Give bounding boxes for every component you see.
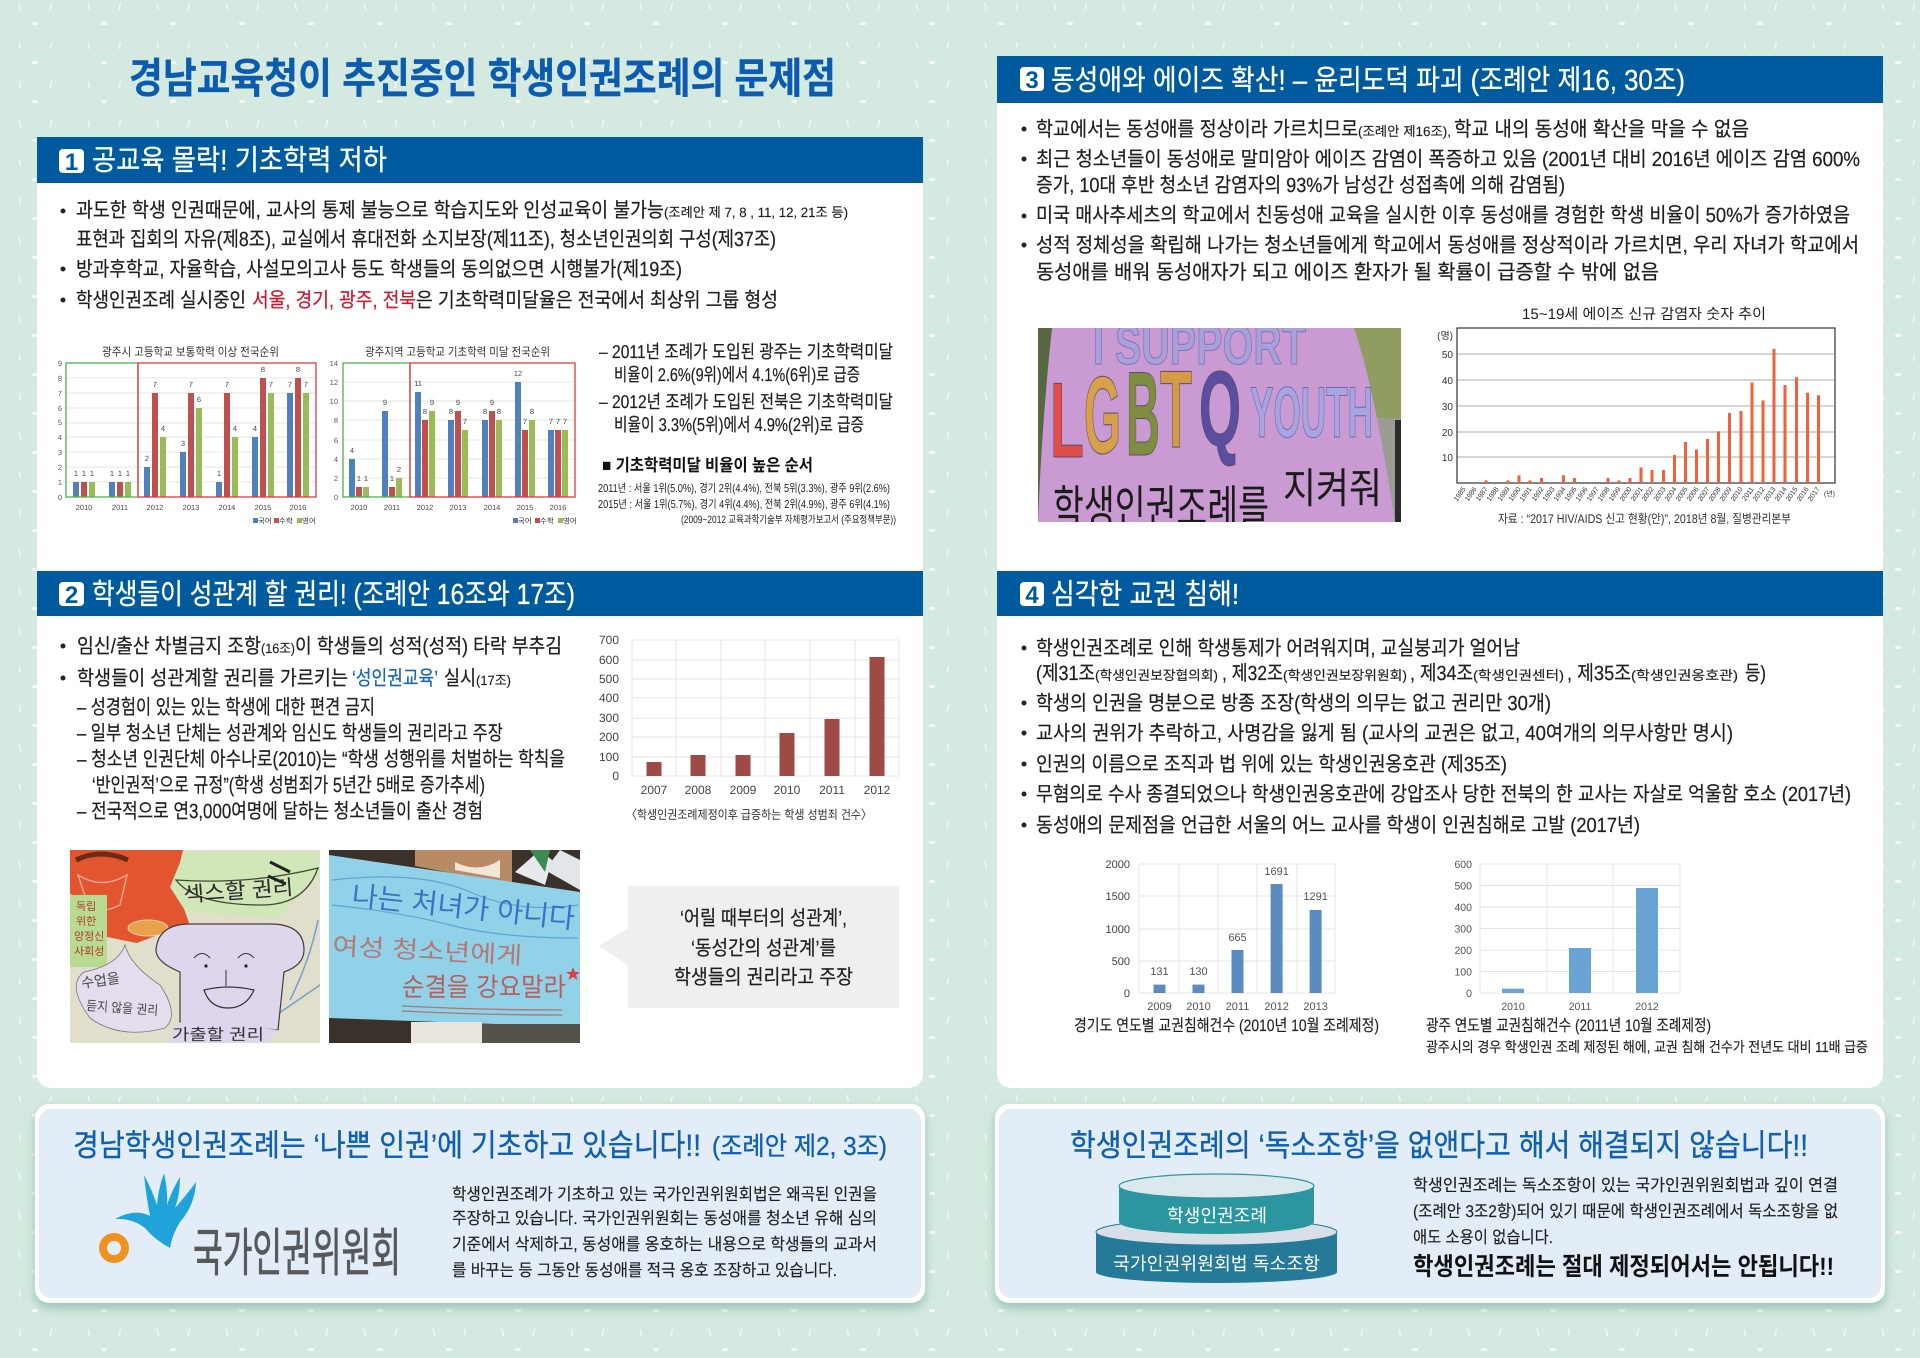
section 3: bullet text: 동성애를 배워 동성애자가 되고 에이즈 환자가 될 확률이 급증할 수 밖에 없음 (1036, 261, 1659, 284)
chart: 15~19세 에이즈 신규 감염자: 1992 (1531, 486, 1546, 503)
chart: 광주시 보통학력 이상 전국순위: 8 (261, 365, 265, 374)
chart: 광주시 보통학력 이상 전국순위: 2 (145, 454, 149, 463)
chart: 15~19세 에이즈 신규 감염자: 2000 (1619, 486, 1634, 503)
chart: 15~19세 에이즈 신규 감염자: 1989 (1497, 486, 1512, 503)
section 1: bullet text: 방과후학교, 자율학습, 사설모의고사 등도 학생들의 동의없으면 시행불가(제19조) (76, 258, 682, 281)
chart: 학생 성범죄 건수: 2008 (685, 783, 712, 797)
chart: 15~19세 에이즈 신규 감염자 (1437, 306, 1835, 526)
section 4: bullet text: 학생인권조례로 인해 학생통제가 어려워지며, 교실붕괴가 얼어남 (1036, 637, 1520, 660)
chart: 학생 성범죄 건수: 400 (599, 691, 619, 705)
chart: 15~19세 에이즈 신규 감염자: 40 (1442, 376, 1453, 387)
section 4: header bar: 4 (1025, 582, 1039, 609)
chart: 경기도 교권침해건수: 1691 (1264, 866, 1289, 878)
panel: 독소조항 box (995, 1104, 1885, 1303)
chart: 경기도 교권침해건수: 2010 (1186, 1001, 1211, 1013)
chart: 광주시 보통학력 이상 전국순위: 6 (197, 395, 201, 404)
chart: 광주시 보통학력 이상 전국순위: 1 (74, 469, 78, 478)
chart: 광주 교권침해건수: 2012 (1635, 1001, 1659, 1013)
chart: 광주시 보통학력 이상 전국순위: 6 (58, 404, 62, 413)
section 3: bullet text: (조례안 제16조), (1358, 124, 1451, 139)
chart: 15~19세 에이즈 신규 감염자: 10 (1442, 453, 1453, 464)
chart: 광주지역 기초학력 미달 전국순위: 8 (497, 407, 501, 416)
chart: 15~19세 에이즈 신규 감염자: 1998 (1597, 486, 1612, 503)
chart: 경기도 교권침해건수: 2011 (1226, 1001, 1249, 1013)
chart: 광주 교권침해건수: 2010 (1501, 1001, 1525, 1013)
chart: 학생 성범죄 건수: 600 (599, 653, 619, 667)
chart: 광주지역 기초학력 미달 전국순위: 광주지역 고등학교 기초학력 미달 전국순위 (365, 345, 550, 359)
chart: 경기도 교권침해건수: 131 (1150, 966, 1169, 978)
section 2: bullet text: ‘성인권교육’ (352, 667, 438, 690)
chart: 광주시 보통학력 이상 전국순위: 4 (233, 424, 237, 433)
photo: LGBTQ youth sign: L (1050, 360, 1084, 480)
section 1: header bar: 1 (65, 149, 78, 176)
chart: 15~19세 에이즈 신규 감염자: 2001 (1630, 486, 1645, 503)
section 4: bullet text (1022, 637, 1851, 837)
section 1: bullet text: 표현과 집회의 자유(제8조), 교실에서 휴대전화 소지보장(제11조), 청소년인권의회 구성(제37조) (76, 228, 776, 251)
callout: 성관계 주장: ‘동성간의 성관계’를 (691, 937, 836, 960)
chart: 15~19세 에이즈 신규 감염자: 2006 (1686, 486, 1701, 503)
chart: 광주지역 기초학력 미달 전국순위: 8 (530, 407, 534, 416)
section 4: header bar: 심각한 교권 침해! (1051, 579, 1239, 611)
section 2: bullet text: (17조) (476, 673, 511, 688)
chart: 광주시 보통학력 이상 전국순위: 수학 (279, 516, 293, 526)
text block: 국가인권위원회법 설명: 학생인권조례가 기초하고 있는 국가인권위원회법은 왜곡된 인권을 (452, 1185, 877, 1204)
chart: 학생 성범죄 건수: 700 (599, 633, 619, 647)
photo: 권리 poster (70, 850, 320, 1045)
text block: 독소조항 설명 (1413, 1176, 1838, 1281)
section 1: bullet text: 학생인권조례 실시중인 (76, 289, 246, 312)
chart: 학생 성범죄 건수: 2009 (730, 783, 757, 797)
chart: 학생 성범죄 건수: 2010 (774, 783, 801, 797)
text block: 국가인권위원회법 설명 (452, 1185, 877, 1280)
photo: 권리 poster: 독립 (76, 900, 96, 913)
section 1: bullet text: 과도한 학생 인권때문에, 교사의 통제 불능으로 학습지도와 인성교육이 불가능 (76, 199, 664, 222)
chart: 광주지역 기초학력 미달 전국순위: 1 (364, 474, 368, 483)
section 3: bullet text: 성적 정체성을 확립해 나가는 청소년들에게 학교에서 동성애를 정상적이라 가르치면, 우리 자녀가 학교에서 (1036, 234, 1859, 257)
chart: 광주시 보통학력 이상 전국순위: 2010 (76, 503, 92, 512)
section 3: bullet text: 학교에서는 동성애를 정상이라 가르치므로 (1036, 118, 1358, 141)
section 4: bullet text: (학생인권옹호관) (1631, 668, 1738, 683)
section 4: bullet text: 동성애의 문제점을 언급한 서울의 어느 교사를 학생이 인권침해로 고발 (2017년) (1036, 814, 1640, 837)
section 4: bullet text: (학생인권보장위원회) (1283, 668, 1407, 683)
section 1: bullet text: (조례안 제 7, 8 , 11, 12, 21조 등) (664, 205, 848, 220)
chart: 광주지역 기초학력 미달 전국순위: 11 (414, 379, 422, 388)
chart: 광주시 보통학력 이상 전국순위: 2014 (219, 503, 235, 512)
chart: 15~19세 에이즈 신규 감염자: 2007 (1697, 486, 1712, 503)
chart: 광주지역 기초학력 미달 전국순위: 9 (383, 398, 387, 407)
section 2: bullet text: 임신/출산 차별금지 조항 (77, 635, 261, 658)
chart: 15~19세 에이즈 신규 감염자: 2014 (1774, 486, 1789, 503)
chart: 15~19세 에이즈 신규 감염자: 1995 (1564, 486, 1579, 503)
section 3: header bar: 동성애와 에이즈 확산! – 윤리도덕 파괴 (조례안 제16, 30조) (1051, 65, 1685, 97)
heading: 독소조항: 학생인권조례의 ‘독소조항’을 없앤다고 해서 해결되지 않습니다!! (1070, 1128, 1808, 1163)
text block: 국가인권위원회법 설명: 를 바꾸는 등 그동안 동성애를 적극 옹호 조장하고 있습니다. (452, 1261, 837, 1280)
chart: 경기도 교권침해건수: 2013 (1303, 1001, 1328, 1013)
section 1: achievement notes: – 2011년 조례가 도입된 광주는 기초학력미달 (599, 341, 893, 362)
photo: blue banner: 여성 청소년에게 (332, 926, 523, 971)
chart: 광주 교권침해건수: 500 (1454, 880, 1472, 892)
callout: 성관계 주장: ‘어릴 때부터의 성관계’, (680, 907, 847, 930)
chart: 광주지역 기초학력 미달 전국순위: 국어 (518, 516, 532, 526)
chart: 학생 성범죄 건수: 200 (599, 730, 619, 744)
chart: 광주시 보통학력 이상 전국순위: 7 (58, 389, 62, 398)
chart: 광주지역 기초학력 미달 전국순위: 2013 (450, 503, 466, 512)
chart: 광주지역 기초학력 미달 전국순위: 8 (483, 407, 487, 416)
icon: layered cylinders (1096, 1174, 1337, 1283)
callout: 성관계 주장: 학생들의 권리라고 주장 (674, 966, 853, 989)
section 1: achievement notes: – 2012년 조례가 도입된 전북은 기초학력미달 (599, 391, 893, 412)
chart: 광주지역 기초학력 미달 전국순위: 0 (334, 493, 338, 502)
chart: 광주지역 기초학력 미달 전국순위: 8 (449, 407, 453, 416)
section 4: bullet text: 등) (1745, 662, 1766, 685)
text block: 독소조항 설명: (조례안 3조2항)되어 있기 때문에 학생인권조례에서 독소조항을 없 (1413, 1202, 1838, 1221)
chart: 광주지역 기초학력 미달 전국순위: 7 (563, 417, 567, 426)
chart: 15~19세 에이즈 신규 감염자: 1988 (1486, 486, 1501, 503)
chart: 광주시 보통학력 이상 전국순위: 3 (181, 439, 185, 448)
heading: 나쁜 인권: 경남학생인권조례는 ‘나쁜 인권’에 기초하고 있습니다!! (73, 1128, 701, 1163)
chart: 광주지역 기초학력 미달 전국순위: 7 (556, 417, 560, 426)
chart: 광주시 보통학력 이상 전국순위: 2016 (290, 503, 306, 512)
chart: 15~19세 에이즈 신규 감염자: 1985 (1453, 486, 1468, 503)
section 2: header bar: 학생들이 성관계 할 권리! (조례안 16조와 17조) (92, 579, 575, 611)
chart: 광주지역 기초학력 미달 전국순위: 2 (397, 465, 401, 474)
panel: left white card (37, 137, 923, 1088)
chart: 광주지역 기초학력 미달 전국순위: 2012 (417, 503, 433, 512)
section 2: bullet text (60, 635, 565, 823)
section 4: bullet text: (제31조 (1036, 662, 1095, 685)
chart: 15~19세 에이즈 신규 감염자: 1999 (1608, 486, 1623, 503)
chart: 학생 성범죄 건수: 2011 (819, 783, 845, 797)
chart: 광주시 보통학력 이상 전국순위: 2012 (147, 503, 163, 512)
chart: 광주시 보통학력 이상 전국순위: 7 (225, 380, 229, 389)
section 2: bullet text: (16조) (261, 641, 295, 656)
photo: LGBTQ youth sign: T (1160, 348, 1192, 471)
section 4: bullet text: (학생인권센터) (1473, 668, 1564, 683)
chart: 광주지역 기초학력 미달 전국순위: 9 (456, 398, 460, 407)
chart: 광주지역 기초학력 미달 전국순위: 7 (549, 417, 553, 426)
section 3: bullet text: 미국 매사추세츠의 학교에서 친동성애 교육을 실시한 이후 동성애를 경험한 학생 비율이 50%가 증가하였음 (1036, 204, 1850, 227)
chart: 15~19세 에이즈 신규 감염자: 2009 (1719, 486, 1734, 503)
chart: 15~19세 에이즈 신규 감염자: 2002 (1641, 486, 1656, 503)
chart: 광주지역 기초학력 미달 전국순위: 12 (330, 378, 338, 387)
chart: 15~19세 에이즈 신규 감염자: 1990 (1508, 486, 1523, 503)
chart: 광주 교권침해건수: 200 (1454, 945, 1472, 957)
chart: 광주 교권침해건수: 600 (1454, 859, 1472, 871)
section 1: header bar: 공교육 몰락! 기초학력 저하 (92, 145, 387, 177)
chart: 15~19세 에이즈 신규 감염자: 20 (1442, 428, 1453, 439)
section 2: bullet text: – 전국적으로 연3,000여명에 달하는 청소년들이 출산 경험 (77, 800, 483, 823)
chart: 경기도 교권침해건수: 1000 (1106, 924, 1130, 936)
chart: 15~19세 에이즈 신규 감염자: 1997 (1586, 486, 1601, 503)
chart: 광주지역 기초학력 미달 전국순위: 4 (350, 446, 354, 455)
section 1: bullet text: 은 기초학력미달율은 전국에서 최상위 그룹 형성 (416, 289, 778, 312)
chart: 광주시 보통학력 이상 전국순위: 8 (58, 374, 62, 383)
chart: 15~19세 에이즈 신규 감염자: 2005 (1675, 486, 1690, 503)
chart: 광주지역 기초학력 미달 전국순위: 2 (334, 474, 338, 483)
chart: 광주 교권침해건수 (1426, 859, 1868, 1056)
chart: 15~19세 에이즈 신규 감염자: 1991 (1519, 486, 1534, 503)
section 2: header bar: 2 (65, 582, 78, 609)
section 2: bullet text: 학생들이 성관계할 권리를 가르키는 (77, 667, 348, 690)
chart: 광주시 보통학력 이상 전국순위: 2 (58, 463, 62, 472)
chart: 15~19세 에이즈 신규 감염자: 자료 : “2017 HIV/AIDS 신고 현황(안)”, 2018년 8월, 질병관리본부 (1498, 512, 1791, 526)
chart: 광주시 보통학력 이상 전국순위: 2011 (112, 503, 128, 512)
chart: 15~19세 에이즈 신규 감염자: 2010 (1730, 486, 1745, 503)
chart: 15~19세 에이즈 신규 감염자: 50 (1442, 350, 1453, 361)
chart: 광주시 보통학력 이상 전국순위: 7 (304, 380, 308, 389)
photo: LGBTQ youth sign: YOUTH (1250, 373, 1373, 453)
chart: 광주 교권침해건수: 100 (1454, 966, 1472, 978)
text block: 독소조항 설명: 학생인권조례는 독소조항이 있는 국가인권위원회법과 깊이 연결 (1413, 1176, 1838, 1195)
photo: 권리 poster: 양정신 (74, 930, 104, 943)
chart: 15~19세 에이즈 신규 감염자: 2017 (1807, 486, 1822, 503)
section 3: bullet text (1022, 118, 1860, 284)
chart: 광주시 보통학력 이상 전국순위: 7 (288, 380, 292, 389)
photo: 권리 poster: 듣지 않을 권리 (86, 995, 159, 1019)
chart: 광주지역 기초학력 미달 전국순위: 7 (523, 417, 527, 426)
chart: 경기도 교권침해건수: 2009 (1147, 1001, 1172, 1013)
chart: 광주지역 기초학력 미달 전국순위 (330, 345, 577, 526)
chart: 광주시 보통학력 이상 전국순위: 5 (58, 418, 62, 427)
section 2: bullet text: 이 학생들의 성적(성적) 타락 부추김 (295, 635, 562, 658)
section 1: bullet text (60, 199, 848, 312)
photo: 권리 poster: 섹스할 권리 (182, 871, 294, 909)
chart: 학생 성범죄 건수: 2012 (864, 783, 891, 797)
title: 경남교육청이 추진중인 학생인권조례의 문제점 (129, 55, 836, 102)
section 1: achievement notes: 비율이 2.6%(9위)에서 4.1%(6위)로 급증 (614, 364, 860, 385)
chart: 학생 성범죄 건수: 500 (599, 672, 619, 686)
chart: 광주지역 기초학력 미달 전국순위: 1 (390, 474, 394, 483)
section 2: header bar (37, 571, 923, 616)
section 4: bullet text: , 제34조 (1410, 662, 1473, 685)
chart: 광주지역 기초학력 미달 전국순위: 2014 (484, 503, 500, 512)
chart: 15~19세 에이즈 신규 감염자: 2004 (1664, 486, 1679, 503)
photo: LGBTQ youth sign (1038, 328, 1401, 522)
chart: 경기도 교권침해건수: 2000 (1106, 859, 1130, 871)
section 2: bullet text: 실시 (444, 667, 476, 690)
panel: right white card (997, 56, 1883, 1088)
section 1: bullet text: 서울, 경기, 광주, 전북 (252, 289, 416, 312)
chart: 15~19세 에이즈 신규 감염자: 30 (1442, 402, 1453, 413)
chart: 광주지역 기초학력 미달 전국순위: 2011 (384, 503, 400, 512)
chart: 15~19세 에이즈 신규 감염자: 2012 (1752, 486, 1767, 503)
section 4: bullet text: , 제35조 (1567, 662, 1631, 685)
section 1: achievement notes: (2009~2012 교육과학기술부 자체평가보고서 (주요정책부문)) (681, 514, 896, 526)
chart: 학생 성범죄 건수: 300 (599, 711, 619, 725)
chart: 15~19세 에이즈 신규 감염자: 1996 (1575, 486, 1590, 503)
chart: 광주지역 기초학력 미달 전국순위: 수학 (540, 516, 554, 526)
chart: 광주지역 기초학력 미달 전국순위: 12 (514, 369, 522, 378)
section 4: bullet text: 학생의 인권을 명분으로 방종 조장(학생의 의무는 없고 권리만 30개) (1036, 692, 1551, 715)
chart: 15~19세 에이즈 신규 감염자: 1993 (1542, 486, 1557, 503)
section 1: achievement notes (598, 341, 896, 526)
chart: 광주시 보통학력 이상 전국순위: 8 (296, 365, 300, 374)
chart: 경기도 교권침해건수: 500 (1112, 956, 1130, 968)
chart: 15~19세 에이즈 신규 감염자: 2003 (1653, 486, 1668, 503)
chart: 광주시 보통학력 이상 전국순위: 4 (58, 433, 62, 442)
chart: 광주시 보통학력 이상 전국순위: 1 (90, 469, 94, 478)
photo: LGBTQ youth sign: I SUPPORT (1093, 313, 1306, 376)
icon: 국가인권위원회 logo (103, 1173, 401, 1283)
chart: 광주시 보통학력 이상 전국순위: 영어 (302, 516, 316, 526)
chart: 광주시 보통학력 이상 전국순위: 2013 (183, 503, 199, 512)
chart: 광주시 보통학력 이상 전국순위: 9 (58, 359, 62, 368)
chart: 광주지역 기초학력 미달 전국순위: 14 (330, 359, 338, 368)
icon: layered cylinders: 학생인권조례 (1167, 1205, 1267, 1226)
photo: LGBTQ youth sign: 지켜줘 (1283, 455, 1382, 516)
chart: 경기도 교권침해건수: 0 (1124, 988, 1130, 1000)
chart: 15~19세 에이즈 신규 감염자: 2016 (1796, 486, 1811, 503)
chart: 광주시 보통학력 이상 전국순위: 광주시 고등학교 보통학력 이상 전국순위 (102, 345, 279, 359)
photo: blue banner (329, 850, 580, 1043)
section 3: bullet text: 증가, 10대 후반 청소년 감염자의 93%가 남성간 성접촉에 의해 감염됨) (1036, 174, 1565, 197)
chart: 15~19세 에이즈 신규 감염자: 2013 (1763, 486, 1778, 503)
chart: 학생 성범죄 건수: 0 (612, 769, 619, 783)
chart: 광주지역 기초학력 미달 전국순위: 2015 (517, 503, 533, 512)
photo: 권리 poster: 가출할 권리 (172, 1021, 264, 1045)
chart: 광주 교권침해건수: 400 (1454, 902, 1472, 914)
photo: LGBTQ youth sign: 학생인권조례를 (1053, 469, 1269, 539)
section 3: header bar: 3 (1025, 67, 1039, 94)
chart: 광주 교권침해건수: 0 (1466, 988, 1472, 1000)
chart: 광주시 보통학력 이상 전국순위: 1 (82, 469, 86, 478)
text block: 국가인권위원회법 설명: 주장하고 있습니다. 국가인권위원회는 동성애를 청소년 유해 심의 (452, 1209, 877, 1228)
chart: 광주 교권침해건수: 광주 연도별 교권침해건수 (2011년 10월 조례제정) (1426, 1017, 1711, 1035)
chart: 광주지역 기초학력 미달 전국순위: 2016 (550, 503, 566, 512)
chart: 15~19세 에이즈 신규 감염자: 1994 (1553, 486, 1568, 503)
chart: 15~19세 에이즈 신규 감염자: 2008 (1708, 486, 1723, 503)
section 4: header bar (997, 571, 1883, 616)
chart: 15~19세 에이즈 신규 감염자: 2015 (1785, 486, 1800, 503)
chart: 경기도 교권침해건수: 130 (1189, 966, 1208, 978)
photo: 권리 poster: 수업을 (80, 968, 121, 993)
icon: layered cylinders: 국가인권위원회법 독소조항 (1113, 1253, 1320, 1274)
chart: 광주지역 기초학력 미달 전국순위: 8 (423, 407, 427, 416)
chart: 광주시 보통학력 이상 전국순위: 7 (153, 380, 157, 389)
chart: 광주시 보통학력 이상 전국순위 (58, 345, 316, 526)
chart: 광주시 보통학력 이상 전국순위: 1 (118, 469, 122, 478)
chart: 광주 교권침해건수: 2011 (1569, 1001, 1591, 1013)
chart: 15~19세 에이즈 신규 감염자: 1987 (1475, 486, 1490, 503)
section 4: bullet text: , 제32조 (1222, 662, 1283, 685)
chart: 광주시 보통학력 이상 전국순위: 7 (189, 380, 193, 389)
chart: 광주지역 기초학력 미달 전국순위: 7 (463, 417, 467, 426)
chart: 경기도 교권침해건수: 1291 (1303, 891, 1328, 903)
chart: 광주시 보통학력 이상 전국순위: 1 (126, 469, 130, 478)
chart: 경기도 교권침해건수: 2012 (1264, 1001, 1289, 1013)
chart: 15~19세 에이즈 신규 감염자: 15~19세 에이즈 신규 감염자 숫자 추이 (1522, 306, 1766, 323)
section 2: bullet text: – 일부 청소년 단체는 성관계와 임신도 학생들의 권리라고 주장 (77, 722, 503, 745)
chart: 광주지역 기초학력 미달 전국순위: 1 (357, 474, 361, 483)
section 3: header bar (997, 56, 1883, 103)
chart: 광주시 보통학력 이상 전국순위: 1 (58, 478, 62, 487)
photo: 권리 poster: 위한 (76, 915, 96, 928)
callout: 성관계 주장 (599, 886, 899, 1008)
section 1: achievement notes: 2011년 : 서울 1위(5.0%), 경기 2위(4.4%), 전북 5위(3.3%), 광주 9위(2.6%) (598, 482, 890, 495)
chart: 광주시 보통학력 이상 전국순위: 2015 (255, 503, 271, 512)
chart: 15~19세 에이즈 신규 감염자: (년) (1824, 490, 1835, 498)
section 4: bullet text: 인권의 이름으로 조직과 법 위에 있는 학생인권옹호관 (제35조) (1036, 753, 1507, 776)
section 2: bullet text: ‘반인권적’으로 규정”(학생 성범죄가 5년간 5배로 증가추세) (92, 774, 485, 797)
chart: 광주지역 기초학력 미달 전국순위: 9 (490, 398, 494, 407)
chart: 광주지역 기초학력 미달 전국순위: 영어 (563, 516, 577, 526)
section 4: bullet text: 교사의 권위가 추락하고, 사명감을 잃게 됨 (교사의 교권은 없고, 40여개의 의무사항만 명시) (1036, 722, 1733, 745)
chart: 학생 성범죄 건수: 2007 (641, 783, 668, 797)
chart: 광주시 보통학력 이상 전국순위: 1 (217, 469, 221, 478)
chart: 광주지역 기초학력 미달 전국순위: 6 (334, 436, 338, 445)
chart: 광주지역 기초학력 미달 전국순위: 2010 (351, 503, 367, 512)
section 3: bullet text: 학교 내의 동성애 확산을 막을 수 없음 (1454, 118, 1749, 141)
chart: 광주시 보통학력 이상 전국순위: 3 (58, 448, 62, 457)
section 1: header bar (37, 137, 923, 183)
photo: blue banner: 나는 처녀가 아니다 (350, 874, 577, 937)
chart: 경기도 교권침해건수: 1500 (1106, 891, 1130, 903)
chart: 15~19세 에이즈 신규 감염자: 2011 (1741, 486, 1756, 502)
chart: 광주시 보통학력 이상 전국순위: 0 (58, 493, 62, 502)
text block: 독소조항 설명: 애도 소용이 없습니다. (1413, 1228, 1553, 1247)
chart: 학생 성범죄 건수: 〈학생인권조례제정이후 급증하는 학생 성범죄 건수〉 (626, 808, 872, 822)
chart: 경기도 교권침해건수: 665 (1228, 932, 1247, 944)
section 2: bullet text: – 청소년 인권단체 아수나로(2010)는 “학생 성행위를 처벌하는 학칙을 (77, 748, 565, 771)
chart: 15~19세 에이즈 신규 감염자: (명) (1437, 330, 1453, 342)
photo: LGBTQ youth sign: Q (1199, 350, 1241, 468)
photo: blue banner: 순결을 강요말라 (402, 967, 566, 1004)
text block: 국가인권위원회법 설명: 기준에서 삭제하고, 동성애를 옹호하는 내용으로 학생들의 교과서 (452, 1235, 877, 1254)
photo: LGBTQ youth sign: G (1084, 354, 1121, 477)
chart: 경기도 교권침해건수: 경기도 연도별 교권침해건수 (2010년 10월 조례제정) (1074, 1017, 1379, 1035)
section 4: bullet text: (학생인권보장협의회) (1095, 668, 1218, 683)
photo: 권리 poster: 사회성 (74, 945, 104, 958)
chart: 광주시 보통학력 이상 전국순위: 7 (269, 380, 273, 389)
icon: 국가인권위원회 logo: 국가인권위원회 (193, 1225, 401, 1283)
heading: 나쁜 인권: (조례안 제2, 3조) (712, 1131, 887, 1161)
chart: 광주 교권침해건수: 300 (1454, 924, 1472, 936)
text block: 독소조항 설명: 학생인권조례는 절대 제정되어서는 안됩니다!! (1413, 1253, 1834, 1281)
chart: 광주지역 기초학력 미달 전국순위: 8 (334, 416, 338, 425)
section 1: achievement notes: 2015년 : 서울 1위(5.7%), 경기 4위(4.4%), 전북 2위(4.9%), 광주 6위(4.1%) (598, 498, 890, 511)
chart: 광주지역 기초학력 미달 전국순위: 9 (430, 398, 434, 407)
chart: 15~19세 에이즈 신규 감염자: 1986 (1464, 486, 1479, 503)
chart: 광주시 보통학력 이상 전국순위: 국어 (258, 516, 272, 526)
chart: 학생 성범죄 건수 (599, 633, 899, 822)
section 2: bullet text: – 성경험이 있는 있는 학생에 대한 편견 금지 (77, 696, 375, 719)
chart: 광주지역 기초학력 미달 전국순위: 4 (334, 455, 338, 464)
section 3: bullet text: 최근 청소년들이 동성애로 말미암아 에이즈 감염이 폭증하고 있음 (2001년 대비 2016년 에이즈 감염 600% (1036, 148, 1860, 171)
section 1: achievement notes: 비율이 3.3%(5위)에서 4.9%(2위)로 급증 (614, 414, 864, 435)
chart: 광주 교권침해건수: 광주시의 경우 학생인권 조례 제정된 해에, 교권 침해 건수가 전년도 대비 11배 급증 (1426, 1039, 1868, 1056)
chart: 경기도 교권침해건수 (1074, 859, 1379, 1035)
chart: 광주시 보통학력 이상 전국순위: 1 (110, 469, 114, 478)
chart: 광주시 보통학력 이상 전국순위: 4 (253, 424, 257, 433)
chart: 광주지역 기초학력 미달 전국순위: 10 (330, 397, 338, 406)
chart: 광주시 보통학력 이상 전국순위: 4 (161, 424, 165, 433)
panel: 나쁜 인권 box (35, 1104, 925, 1303)
photo: LGBTQ youth sign: B (1126, 347, 1160, 481)
section 1: achievement notes: ■ 기초학력미달 비율이 높은 순서 (602, 456, 813, 475)
chart: 학생 성범죄 건수: 100 (599, 750, 619, 764)
